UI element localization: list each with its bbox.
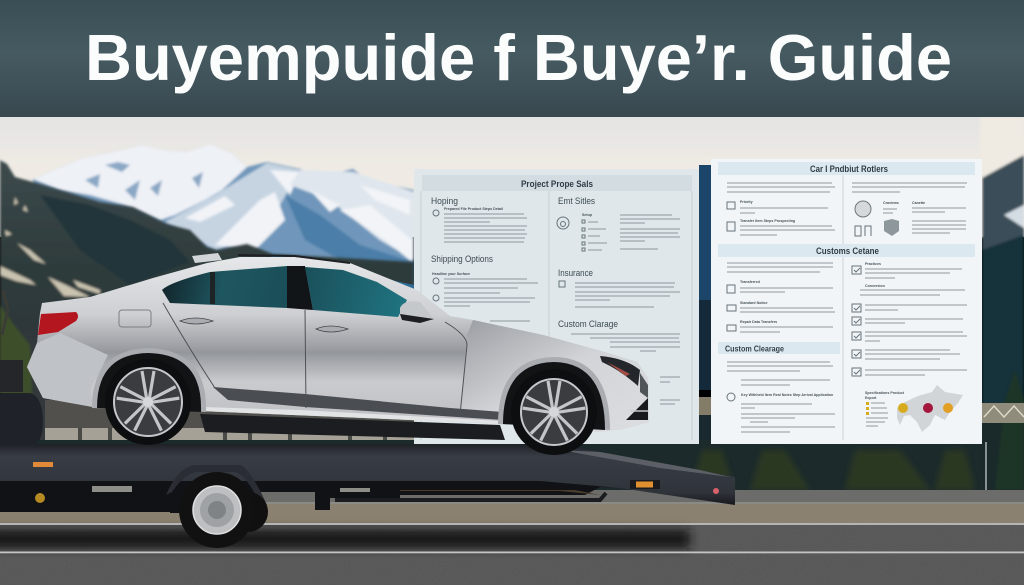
section: Emt Sitles: Emt Sitles [558, 196, 595, 207]
tail light [38, 312, 78, 335]
background: mountain landscape [0, 117, 1024, 492]
blue mountain strip [240, 254, 414, 300]
dark forested ridge left [0, 160, 414, 445]
sill highlight [200, 407, 503, 424]
snowy mountain range [33, 144, 414, 300]
front window [305, 267, 407, 317]
side mirror [400, 301, 435, 323]
road [0, 523, 1024, 585]
gap strip between panels [699, 165, 711, 450]
section: Emt Sitles [557, 196, 680, 251]
fuel door [119, 310, 151, 327]
hitch equipment [0, 290, 43, 444]
trailer lights [33, 462, 719, 503]
custom clearage text: Key Withheld Item Real Notes Step Arrival Application [741, 393, 833, 397]
checklist: Practices [865, 262, 881, 266]
title: Buyempuide f Buye’r. Guide [85, 21, 952, 94]
top left text and icons: Transfer Item Steps Prospecting [740, 219, 795, 223]
trailer wheel [179, 472, 268, 548]
section: Insurance [558, 268, 680, 307]
customs left column: Transferred [740, 280, 760, 284]
panel: shipping document [414, 169, 699, 444]
deck and ramp [0, 444, 735, 505]
front wheel [511, 369, 597, 455]
rear wheel [105, 359, 191, 445]
panel heading: Project Prope Sals [521, 179, 593, 189]
section: Custom Clarage [558, 319, 680, 404]
world map with markers [865, 385, 963, 432]
section: Hoping: Hoping [431, 196, 458, 207]
section: Shipping Options: Headline your Surface [432, 272, 470, 276]
car body [27, 257, 649, 432]
world map with markers: Export [865, 396, 877, 400]
door lines [163, 303, 467, 415]
section: Insurance: Insurance [558, 268, 593, 279]
headlight [600, 356, 640, 386]
section heading: custom clearage: Custom Clearage [725, 344, 784, 354]
custom clearage text [727, 362, 835, 432]
silver car [27, 253, 649, 455]
customs left column: Repair Data Transfers [740, 320, 777, 324]
title banner [0, 0, 1024, 117]
panel: car product document [711, 159, 982, 444]
section heading: custom clearage [718, 342, 840, 354]
rear bumper shading [27, 333, 108, 407]
panel heading: Car I Pndbiut Rotlers [810, 164, 888, 174]
section: Custom Clarage: Custom Clarage [558, 319, 618, 330]
guard rail behind car [45, 400, 415, 444]
world map with markers: Specifications Product [865, 391, 905, 395]
section: Hoping: Prepared File Product Steps Detail [444, 207, 503, 211]
roof trim [238, 255, 350, 263]
top left text and icons [727, 183, 835, 235]
section heading: customs: Customs Cetane [816, 246, 879, 256]
rear window [162, 266, 287, 308]
checklist [852, 262, 967, 376]
section: Shipping Options [431, 254, 538, 321]
under-frame [0, 478, 630, 513]
tree line [0, 370, 1024, 492]
rear wheel arch [92, 348, 206, 412]
top left text and icons: Priority [740, 200, 753, 204]
door handles [180, 318, 348, 332]
top right text and icons: Canette [912, 201, 925, 205]
section: Shipping Options: Shipping Options [431, 254, 493, 265]
right mountains [980, 117, 1024, 410]
checklist: Conversion [865, 284, 885, 288]
under-body shadow [200, 414, 505, 440]
ramp upper surface [560, 450, 730, 477]
flatbed trailer [0, 290, 735, 548]
lower door dark band [213, 387, 503, 420]
front wheel arch [498, 357, 610, 430]
section: Hoping [431, 196, 527, 242]
road shadow under trailer [0, 530, 690, 548]
left tree [0, 305, 32, 395]
section: Emt Sitles: Setup [582, 213, 593, 217]
customs left column [727, 263, 835, 332]
far road and gravel verge [0, 490, 1024, 523]
front grille [640, 373, 648, 398]
top right text and icons: Craviews [883, 201, 899, 205]
bridge [982, 403, 1024, 490]
top right text and icons [852, 183, 967, 236]
hood and front fender [460, 320, 649, 432]
customs left column: Standard Notice [740, 301, 768, 305]
trailer fender [166, 465, 267, 505]
